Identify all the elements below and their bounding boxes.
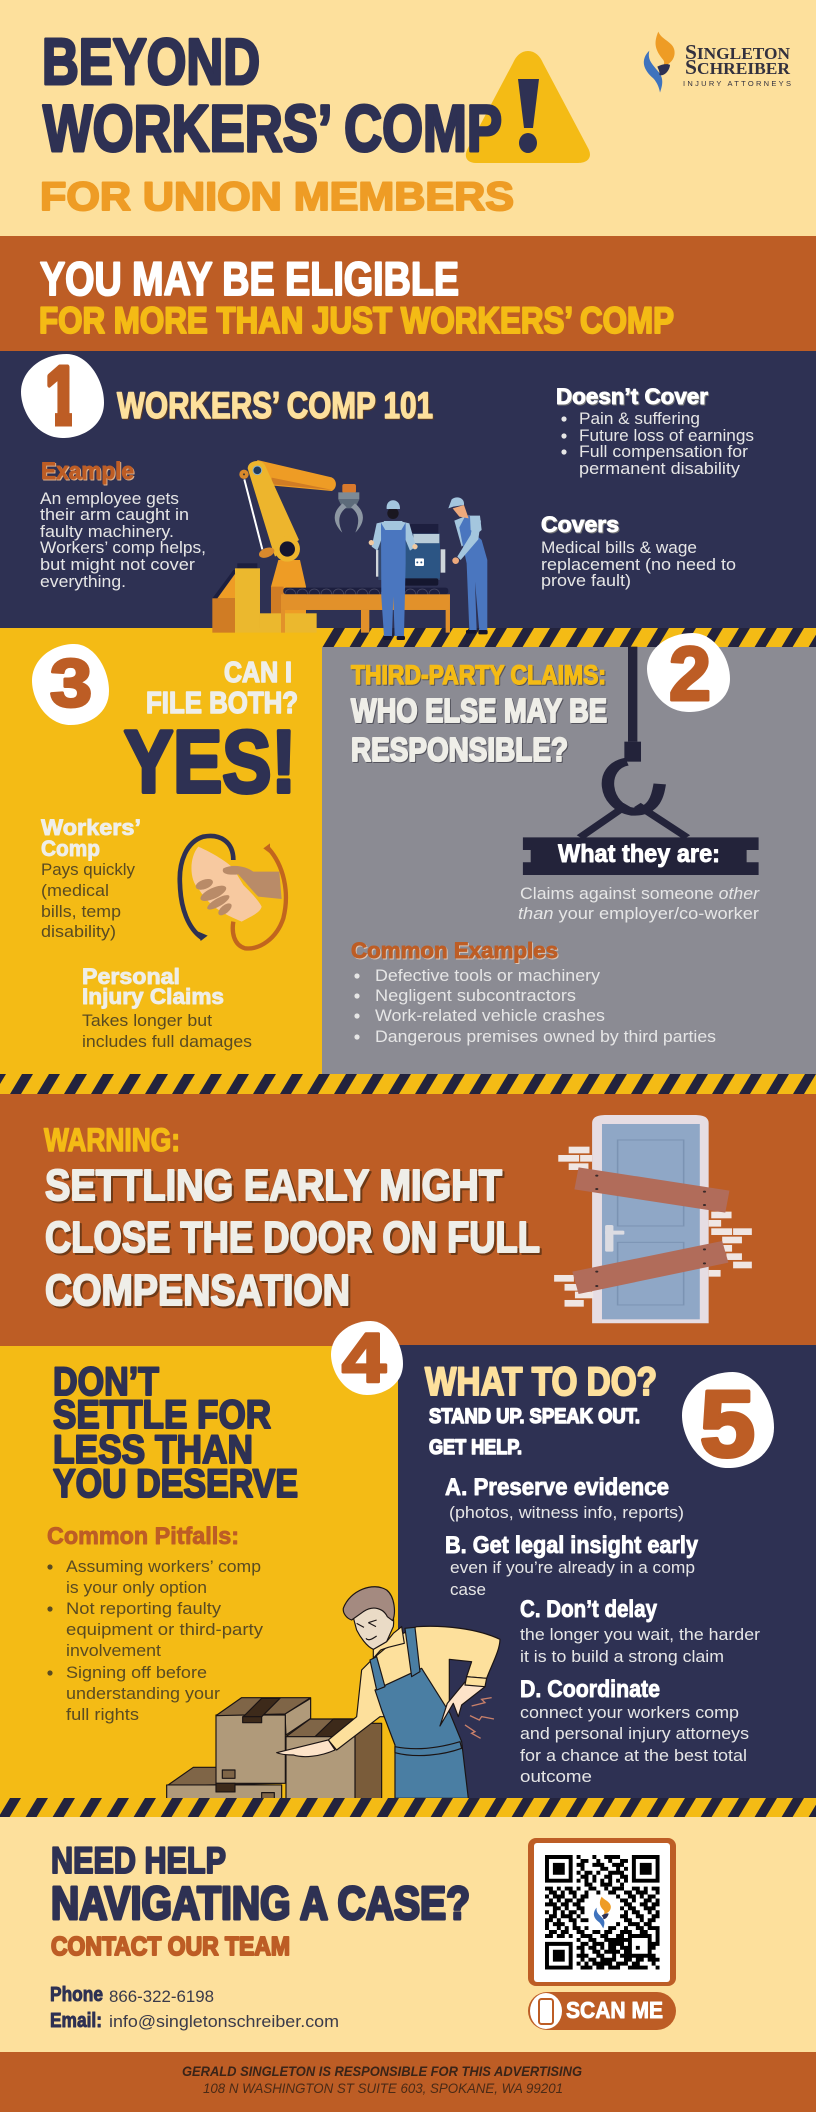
panel: warning bbox=[0, 1094, 816, 1346]
list: pitfalls: understanding your bbox=[66, 1684, 220, 1703]
number 5 badge bbox=[682, 1371, 774, 1476]
text: example body: faulty machinery. bbox=[40, 522, 174, 541]
text: phone: 866-322-6198 bbox=[109, 1987, 214, 2006]
text: doesn't cover: Doesn’t Cover bbox=[556, 384, 708, 409]
text: example body: Workers’ comp helps, bbox=[40, 538, 206, 557]
text: doesn't cover bbox=[556, 384, 754, 478]
heading: who else may be responsible: WHO ELSE MAY BE bbox=[351, 692, 607, 729]
panel: what to do background bbox=[398, 1345, 816, 1798]
step C: C. Don’t delay bbox=[520, 1596, 658, 1623]
text: personal injury claims bbox=[82, 964, 252, 1051]
heading: need help: NEED HELP bbox=[51, 1840, 226, 1881]
list: pitfalls: equipment or third-party bbox=[66, 1620, 264, 1639]
heading: settling early: CLOSE THE DOOR ON FULL bbox=[45, 1213, 540, 1262]
list: pitfalls: Signing off before bbox=[66, 1663, 207, 1682]
heading: can I file both: FILE BOTH? bbox=[146, 685, 298, 720]
heading: don't settle: LESS THAN bbox=[53, 1428, 253, 1472]
hazard stripe middle bbox=[0, 1074, 816, 1094]
logo: SCHREIBER bbox=[685, 55, 791, 79]
step D bbox=[520, 1676, 749, 1786]
hazard stripe top bbox=[322, 628, 816, 647]
hazard stripe lower bbox=[0, 1798, 816, 1817]
step D: outcome bbox=[520, 1767, 592, 1786]
text: workers' comp: (medical bbox=[41, 881, 109, 900]
step B bbox=[445, 1532, 699, 1599]
step D: for a chance at the best total bbox=[520, 1746, 747, 1765]
text: doesn't cover: permanent disability bbox=[579, 459, 741, 478]
text: example body: An employee gets bbox=[40, 489, 179, 508]
logo bbox=[644, 32, 791, 93]
text: covers bbox=[541, 512, 736, 590]
heading: example: Example bbox=[41, 458, 134, 485]
header panel bbox=[0, 0, 816, 236]
text: workers' comp: Workers’ bbox=[41, 815, 141, 840]
text: workers' comp: bills, temp bbox=[41, 902, 121, 921]
footer bbox=[0, 2052, 816, 2112]
panel: workers' comp 101 bbox=[0, 349, 816, 1074]
heading: can I file both bbox=[146, 657, 298, 720]
heading: need help bbox=[51, 1840, 470, 1961]
step B: case bbox=[450, 1580, 486, 1599]
text: personal injury claims: Injury Claims bbox=[82, 984, 224, 1009]
heading: yes: YES! bbox=[124, 712, 296, 811]
label: what they are: What they are: bbox=[558, 840, 720, 868]
text: example body: but might not cover bbox=[40, 555, 195, 574]
list: common examples bbox=[354, 966, 716, 1046]
step C bbox=[520, 1596, 760, 1666]
subtitle: FOR UNION MEMBERS bbox=[40, 175, 514, 219]
heading: third-party claims: THIRD-PARTY CLAIMS: bbox=[351, 660, 606, 690]
step A: (photos, witness info, reports) bbox=[449, 1503, 684, 1522]
title: WORKERS’ COMP bbox=[43, 91, 502, 165]
list: pitfalls: full rights bbox=[66, 1705, 139, 1724]
text: covers: Covers bbox=[541, 512, 619, 537]
heading: don't settle: SETTLE FOR bbox=[53, 1393, 271, 1437]
heading: don't settle bbox=[53, 1360, 298, 1506]
text: email bbox=[50, 2010, 339, 2032]
step A bbox=[445, 1474, 684, 1522]
text: example body: everything. bbox=[40, 572, 126, 591]
step A: A. Preserve evidence bbox=[445, 1474, 669, 1501]
heading: need help: CONTACT OUR TEAM bbox=[51, 1931, 290, 1961]
heading: can I file both: CAN I bbox=[224, 657, 292, 689]
heading: don't settle: YOU DESERVE bbox=[53, 1462, 298, 1506]
text: covers: replacement (no need to bbox=[541, 555, 736, 574]
panel: can I file both bbox=[32, 644, 298, 1051]
illustration: crane hook and beam bbox=[523, 647, 759, 875]
step C: it is to build a strong claim bbox=[520, 1647, 724, 1666]
text: email: info@singletonschreiber.com bbox=[109, 2012, 339, 2031]
subheading: stand up: STAND UP. SPEAK OUT. bbox=[429, 1405, 640, 1428]
text: example body bbox=[40, 489, 206, 591]
footer: 108 N WASHINGTON ST SUITE 603, SPOKANE, WA 99201 bbox=[203, 2080, 563, 2096]
list: pitfalls: Not reporting faulty bbox=[66, 1599, 222, 1618]
panel: contact bbox=[0, 1817, 816, 2052]
text: example body: their arm caught in bbox=[40, 505, 189, 524]
number 4 badge: 4 bbox=[342, 1319, 386, 1397]
banner: you may be eligible: FOR MORE THAN JUST WORKERS’ COMP bbox=[39, 300, 674, 341]
list: common examples: Dangerous premises owned by third parties bbox=[375, 1027, 716, 1046]
illustration: boarded door bbox=[554, 1115, 752, 1323]
list: pitfalls: is your only option bbox=[66, 1578, 207, 1597]
text: workers' comp: disability) bbox=[41, 922, 116, 941]
illustration: injured worker with boxes bbox=[167, 1587, 500, 1800]
step D: D. Coordinate bbox=[520, 1676, 660, 1703]
step D: connect your workers comp bbox=[520, 1703, 739, 1722]
heading: warning: WARNING: bbox=[44, 1122, 180, 1158]
icon: handshake bbox=[180, 836, 286, 948]
button: scan me: SCAN ME bbox=[566, 1997, 663, 2023]
logo: INJURY ATTORNEYS bbox=[683, 79, 791, 88]
subheading: stand up: GET HELP. bbox=[429, 1436, 522, 1459]
heading: who else may be responsible bbox=[351, 692, 607, 768]
number 3 badge: 3 bbox=[50, 645, 92, 721]
list: common examples: Defective tools or machinery bbox=[375, 966, 601, 985]
logo: SINGLETON bbox=[685, 40, 791, 64]
button: scan me bbox=[528, 1992, 676, 2030]
illustration: factory robot and workers bbox=[212, 460, 488, 640]
text: personal injury claims: Takes longer but bbox=[82, 1011, 212, 1030]
text: email: Email: bbox=[50, 2010, 102, 2032]
heading: common pitfalls: Common Pitfalls: bbox=[47, 1523, 239, 1550]
icon: warning triangle bbox=[466, 51, 590, 163]
text: doesn't cover: Pain & suffering bbox=[579, 409, 700, 428]
text: phone bbox=[50, 1984, 214, 2006]
section 3 background bbox=[0, 628, 322, 1074]
heading: settling early bbox=[45, 1161, 540, 1315]
heading: what to do: WHAT TO DO? bbox=[425, 1360, 657, 1404]
text: doesn't cover: Full compensation for bbox=[579, 442, 748, 461]
text: workers' comp: Comp bbox=[41, 836, 100, 861]
text: personal injury claims: includes full damages bbox=[82, 1032, 252, 1051]
title: BEYOND bbox=[42, 25, 260, 98]
number 3 badge bbox=[32, 644, 109, 725]
section 2 background bbox=[322, 647, 816, 1074]
step B: even if you’re already in a comp bbox=[450, 1558, 695, 1577]
number 1 badge bbox=[21, 349, 104, 442]
number 1 badge: 1 bbox=[45, 349, 79, 442]
subheading: stand up bbox=[429, 1405, 640, 1459]
heading: workers' comp 101: WORKERS’ COMP 101 bbox=[117, 385, 433, 426]
heading: need help: NAVIGATING A CASE? bbox=[51, 1877, 470, 1929]
text: covers: Medical bills & wage bbox=[541, 538, 697, 557]
list: pitfalls: involvement bbox=[66, 1641, 161, 1660]
banner: you may be eligible bbox=[0, 236, 816, 352]
title bbox=[42, 25, 502, 165]
heading: settling early: COMPENSATION bbox=[45, 1266, 350, 1315]
text: personal injury claims: Personal bbox=[82, 964, 180, 989]
text: definition: than your employer/co-worker bbox=[518, 904, 759, 923]
text: doesn't cover: Future loss of earnings bbox=[579, 426, 754, 445]
heading: common examples: Common Examples bbox=[351, 938, 558, 963]
banner: you may be eligible: YOU MAY BE ELIGIBLE bbox=[40, 252, 459, 305]
footer: GERALD SINGLETON IS RESPONSIBLE FOR THIS ADVERTISING bbox=[182, 2063, 582, 2079]
number 2 badge: 2 bbox=[669, 632, 711, 717]
list: common examples: Negligent subcontractors bbox=[375, 986, 576, 1005]
text: definition: Claims against someone other bbox=[520, 884, 760, 903]
text: definition bbox=[518, 884, 760, 923]
step D: and personal injury attorneys bbox=[520, 1724, 749, 1743]
number 4 badge bbox=[331, 1319, 403, 1397]
text: workers' comp: Pays quickly bbox=[41, 860, 135, 879]
icon: pain marks bbox=[465, 1698, 494, 1738]
panel: third-party claims bbox=[351, 632, 760, 1046]
number 2 badge bbox=[647, 632, 730, 717]
panel: what to do bbox=[425, 1360, 774, 1786]
text: workers' comp bbox=[41, 815, 141, 941]
heading: who else may be responsible: RESPONSIBLE? bbox=[351, 731, 568, 768]
number 5 badge: 5 bbox=[700, 1371, 755, 1476]
list: common examples: Work-related vehicle crashes bbox=[375, 1006, 605, 1025]
step C: the longer you wait, the harder bbox=[520, 1625, 760, 1644]
panel: don't settle bbox=[0, 1319, 816, 1798]
step B: B. Get legal insight early bbox=[445, 1532, 699, 1559]
QR code bbox=[528, 1838, 676, 1986]
text: covers: prove fault) bbox=[541, 571, 631, 590]
list: pitfalls: Assuming workers’ comp bbox=[66, 1557, 261, 1576]
list: pitfalls bbox=[47, 1557, 264, 1724]
text: phone: Phone bbox=[50, 1984, 103, 2006]
heading: settling early: SETTLING EARLY MIGHT bbox=[45, 1161, 502, 1210]
heading: don't settle: DON’T bbox=[53, 1360, 159, 1404]
